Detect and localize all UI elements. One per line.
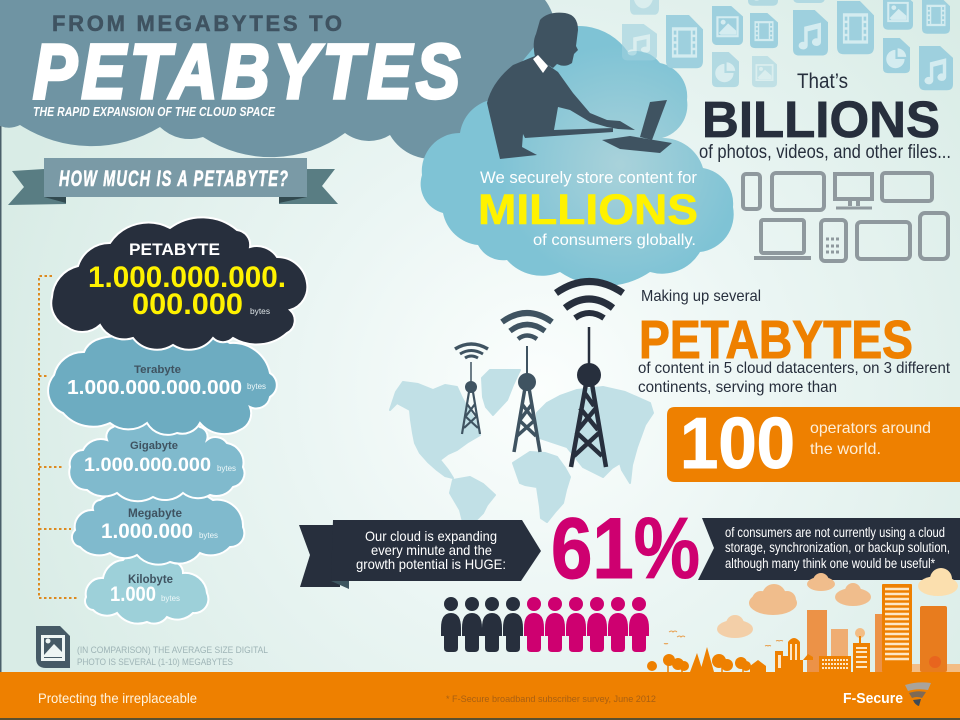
tower: medium [502, 313, 552, 452]
title: PETABYTES [33, 29, 460, 115]
cloud: gigabyte: Gigabyte [130, 440, 178, 452]
tower: small [455, 344, 488, 434]
device icons [743, 173, 948, 261]
banner: how much is a petabyte [8, 158, 338, 205]
pictogram: 4 of 10 dark, 6 of 10 pink [441, 597, 649, 652]
figure: man at laptop [487, 13, 672, 159]
cloud: petabyte: 000.000 [132, 288, 243, 321]
cloud: gigabyte [69, 414, 244, 501]
header cloud [0, 0, 560, 159]
text: making up several petabytes: PETABYTES [639, 310, 913, 370]
panel: 100 operators: the world. [810, 441, 881, 458]
cloud: gigabyte: 1.000.000.000 [84, 455, 211, 476]
text: billions of files [699, 70, 951, 163]
ribbon: growth potential [299, 520, 541, 589]
text: millions of consumers: We securely store content for [480, 168, 697, 187]
cloud: kilobyte: 1.000 [110, 583, 156, 606]
ribbon: growth potential: Our cloud is expanding [365, 528, 497, 544]
comparison note with photo icon: PHOTO IS SEVERAL (1-10) MEGABYTES [77, 657, 233, 668]
footer bar [0, 672, 960, 720]
panel: 100 operators [667, 404, 960, 484]
cloud: petabyte: PETABYTE [129, 240, 220, 259]
comparison note with photo icon [36, 626, 268, 668]
text: millions of consumers [478, 168, 698, 249]
file icons [622, 0, 953, 90]
trees and houses [647, 647, 766, 672]
ribbon: consumers statement [698, 518, 960, 580]
ribbon: growth potential: growth potential is HUGE: [356, 556, 506, 572]
cityscape illustration [647, 568, 960, 672]
cloud: megabyte [72, 483, 244, 565]
cloud: kilobyte [85, 550, 208, 624]
ribbon: growth potential: every minute and the [371, 542, 492, 558]
panel: 100 operators: operators around [810, 420, 931, 437]
text: making up several petabytes: continents, serving more than [638, 379, 837, 396]
birds [664, 631, 783, 646]
footer bar: Protecting the irreplaceable [38, 690, 197, 706]
text: millions of consumers: of consumers globally. [533, 232, 696, 249]
stat: 61%: 61% [551, 501, 700, 597]
cloud: petabyte: bytes [250, 307, 270, 316]
text: millions of consumers: MILLIONS [478, 186, 698, 234]
peach clouds [717, 568, 958, 638]
cloud: millions [421, 26, 734, 286]
cloud: terabyte [48, 336, 277, 435]
footer bar: * F-Secure broadband subscriber survey, June 2012 [446, 694, 656, 705]
dotted connector [39, 276, 79, 598]
tower: large [556, 282, 623, 467]
panel: 100 operators: 100 [680, 404, 795, 484]
world map [390, 370, 653, 526]
cloud: kilobyte: bytes [161, 594, 180, 603]
cloud: petabyte: 1.000.000.000. [88, 261, 286, 294]
cloud: kilobyte: Kilobyte [128, 572, 173, 586]
cloud: megabyte: 1.000.000 [101, 520, 193, 543]
title: THE RAPID EXPANSION OF THE CLOUD SPACE [33, 104, 276, 119]
text: billions of files: BILLIONS [702, 91, 940, 148]
text: billions of files: That’s [797, 70, 848, 93]
cloud: terabyte: bytes [247, 382, 266, 391]
logo: F-Secure: F-Secure [843, 690, 903, 707]
text: making up several petabytes: Making up several [641, 288, 761, 305]
cloud: megabyte: Megabyte [128, 506, 182, 520]
cloud: terabyte: Terabyte [134, 364, 181, 376]
logo: F-Secure [843, 682, 931, 707]
cloud: petabyte [51, 217, 307, 350]
cloud: terabyte: 1.000.000.000.000 [67, 377, 242, 399]
cloud: gigabyte: bytes [217, 464, 236, 473]
text: making up several petabytes [638, 288, 951, 396]
banner: how much is a petabyte: HOW MUCH IS A PETABYTE? [59, 166, 288, 191]
comparison note with photo icon: (IN COMPARISON) THE AVERAGE SIZE DIGITAL [77, 645, 268, 656]
cloud: megabyte: bytes [199, 531, 218, 540]
title: FROM MEGABYTES TO [52, 11, 342, 36]
